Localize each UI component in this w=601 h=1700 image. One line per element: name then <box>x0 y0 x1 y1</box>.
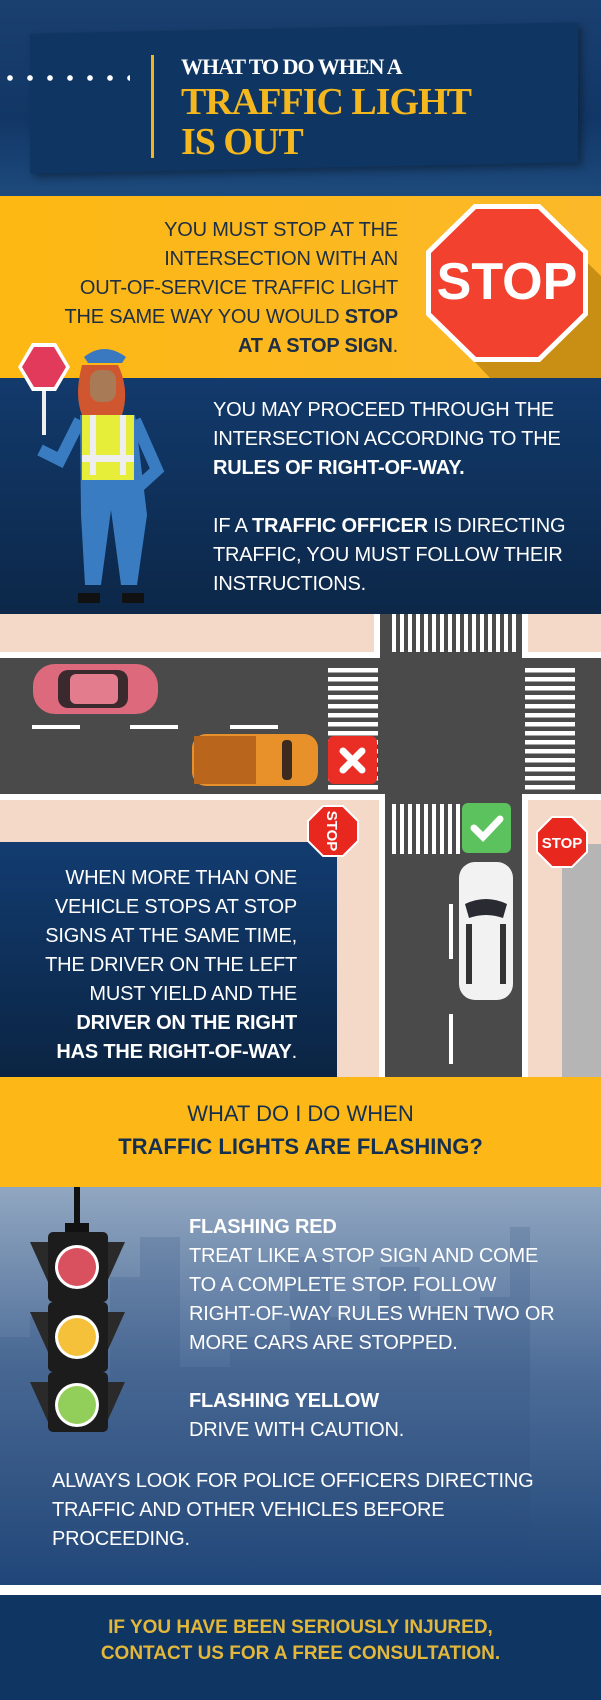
footer: CONTACT US FOR A FREE CONSULTATION. <box>101 1643 500 1664</box>
text: stop rule: OUT-OF-SERVICE TRAFFIC LIGHT <box>80 277 398 299</box>
panel: right-of-way <box>0 378 601 614</box>
icon: stop sign right <box>537 817 587 867</box>
panel: yield text box <box>0 842 337 1077</box>
car: orange truck <box>192 734 318 786</box>
panel: yield text box: VEHICLE STOPS AT STOP <box>55 896 297 918</box>
text: always look <box>52 1470 534 1550</box>
icon: traffic light <box>30 1187 125 1432</box>
title: TRAFFIC LIGHT <box>181 81 471 123</box>
text: flashing red / yellow: TREAT LIKE A STOP SIGN AND COME <box>189 1245 538 1267</box>
icon: traffic officer <box>18 343 164 603</box>
icon: stop sign <box>426 204 588 362</box>
dots decoration <box>0 74 130 82</box>
footer: IF YOU HAVE BEEN SERIOUSLY INJURED, <box>108 1617 493 1638</box>
text: stop rule: INTERSECTION WITH AN <box>164 248 398 270</box>
road scene <box>0 614 601 1077</box>
text: stop rule: YOU MUST STOP AT THE <box>164 219 398 241</box>
header panel <box>0 0 601 196</box>
text: proceed: INSTRUCTIONS. <box>213 573 366 595</box>
text: proceed: TRAFFIC, YOU MUST FOLLOW THEIR <box>213 544 563 566</box>
panel: stop requirement <box>0 196 601 378</box>
panel: yield text box: MUST YIELD AND THE <box>89 983 297 1005</box>
icon: green check <box>462 803 511 853</box>
text: proceed: YOU MAY PROCEED THROUGH THE <box>213 399 554 421</box>
panel: yield text box: SIGNS AT THE SAME TIME, <box>45 925 297 947</box>
text: stop rule: AT A STOP SIGN. <box>238 335 398 357</box>
heading: flashing lights: TRAFFIC LIGHTS ARE FLASHING? <box>118 1134 483 1159</box>
icon: stop sign right: STOP <box>542 835 582 852</box>
text: proceed: INTERSECTION ACCORDING TO THE <box>213 428 561 450</box>
title <box>181 54 472 163</box>
panel: yield text box: THE DRIVER ON THE LEFT <box>45 954 297 976</box>
text: flashing red / yellow: MORE CARS ARE STOPPED. <box>189 1332 458 1354</box>
stop sign shadow <box>475 264 601 378</box>
text: flashing red / yellow: FLASHING YELLOW <box>189 1390 379 1412</box>
panel: yield text box: WHEN MORE THAN ONE <box>65 867 297 889</box>
panel: flashing lights <box>0 1187 601 1585</box>
icon: red x <box>328 736 377 784</box>
text: always look: TRAFFIC AND OTHER VEHICLES BEFORE <box>52 1499 444 1521</box>
text: always look: PROCEEDING. <box>52 1528 190 1550</box>
text: flashing red / yellow <box>189 1216 554 1441</box>
heading: flashing lights <box>0 1077 601 1187</box>
text: always look: ALWAYS LOOK FOR POLICE OFFICERS DIRECTING <box>52 1470 534 1492</box>
panel: yield text box: DRIVER ON THE RIGHT <box>76 1012 297 1034</box>
text: proceed: IF A TRAFFIC OFFICER IS DIRECTING <box>213 515 565 537</box>
title box background <box>30 22 578 174</box>
text: proceed: RULES OF RIGHT-OF-WAY. <box>213 457 465 479</box>
gold divider <box>151 55 154 158</box>
text: flashing red / yellow: TO A COMPLETE STOP. FOLLOW <box>189 1274 496 1296</box>
text: flashing red / yellow: FLASHING RED <box>189 1216 337 1238</box>
text: proceed <box>213 399 565 595</box>
text: stop rule: THE SAME WAY YOU WOULD STOP <box>64 306 398 328</box>
icon: stop sign: STOP <box>437 253 577 311</box>
text: flashing red / yellow: RIGHT-OF-WAY RULES WHEN TWO OR <box>189 1303 554 1325</box>
panel: yield text box: HAS THE RIGHT-OF-WAY. <box>56 1041 297 1063</box>
title: IS OUT <box>181 121 303 163</box>
icon: stop sign rotated <box>307 805 359 857</box>
footer <box>0 1595 601 1700</box>
text: flashing red / yellow: DRIVE WITH CAUTION. <box>189 1419 404 1441</box>
heading: flashing lights: WHAT DO I DO WHEN <box>187 1101 414 1126</box>
car: pink <box>33 664 158 714</box>
title: WHAT TO DO WHEN A <box>181 54 402 79</box>
text: stop rule <box>64 219 398 357</box>
icon: stop sign rotated: STOP <box>323 811 340 851</box>
car: white <box>459 862 513 1000</box>
